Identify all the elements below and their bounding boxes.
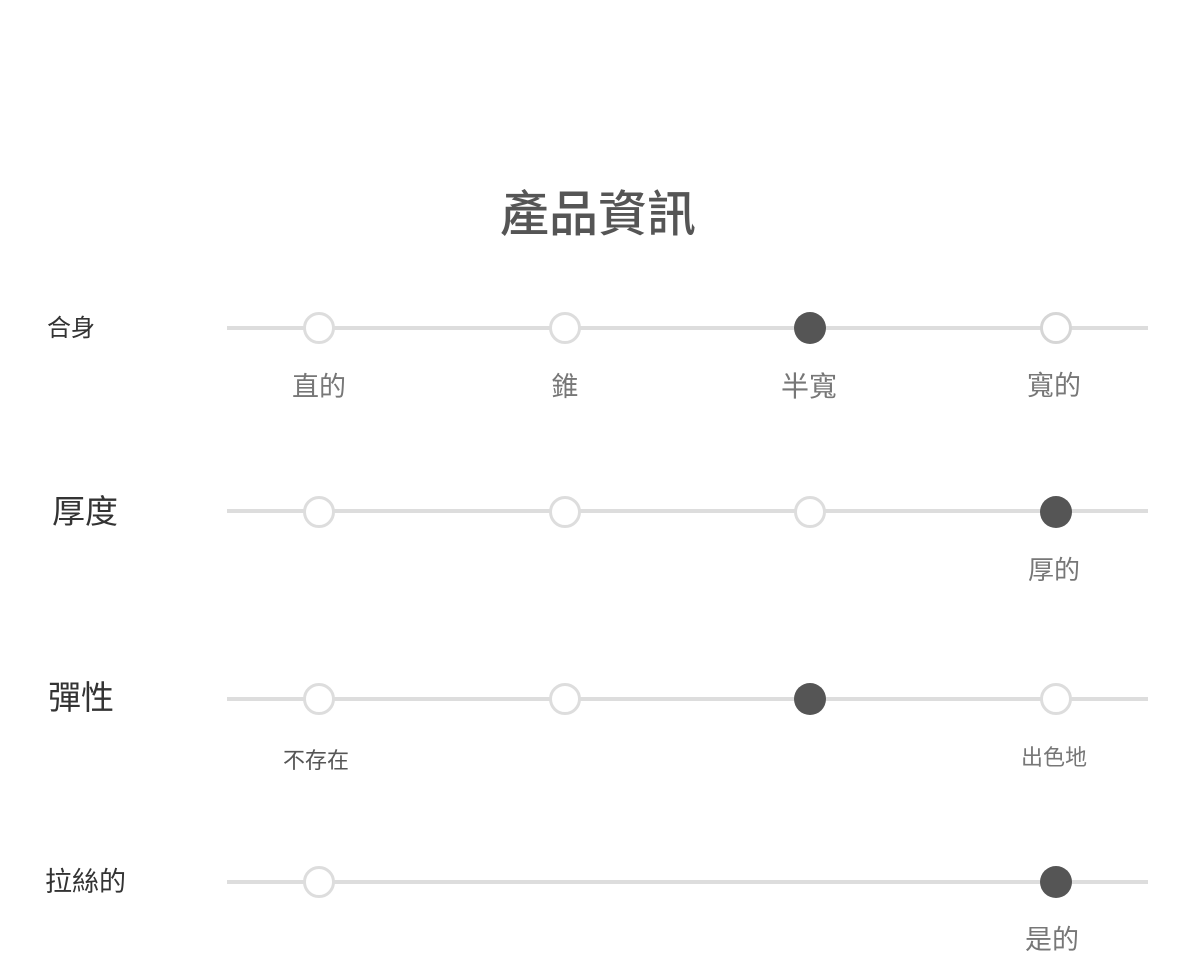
option: none: 不存在 (283, 748, 349, 773)
option: tapered: 錐 (552, 372, 578, 402)
label: fit: 合身 (47, 315, 95, 342)
title: 產品資訊 (500, 188, 696, 242)
option: semi-wide: 半寬 (781, 371, 837, 402)
slider: fit (227, 312, 1148, 344)
option: wide: 寬的 (1027, 371, 1081, 401)
slider: elasticity (227, 683, 1148, 715)
label: thickness: 厚度 (52, 493, 118, 530)
option: thick: 厚的 (1028, 555, 1080, 585)
label: elasticity: 彈性 (48, 679, 114, 716)
slider: thickness (227, 496, 1148, 528)
label: drawstring: 拉絲的 (45, 867, 126, 897)
option: excellent: 出色地 (1021, 745, 1087, 770)
option: straight: 直的 (292, 372, 346, 402)
option: yes: 是的 (1025, 925, 1079, 955)
slider: drawstring (227, 866, 1148, 898)
